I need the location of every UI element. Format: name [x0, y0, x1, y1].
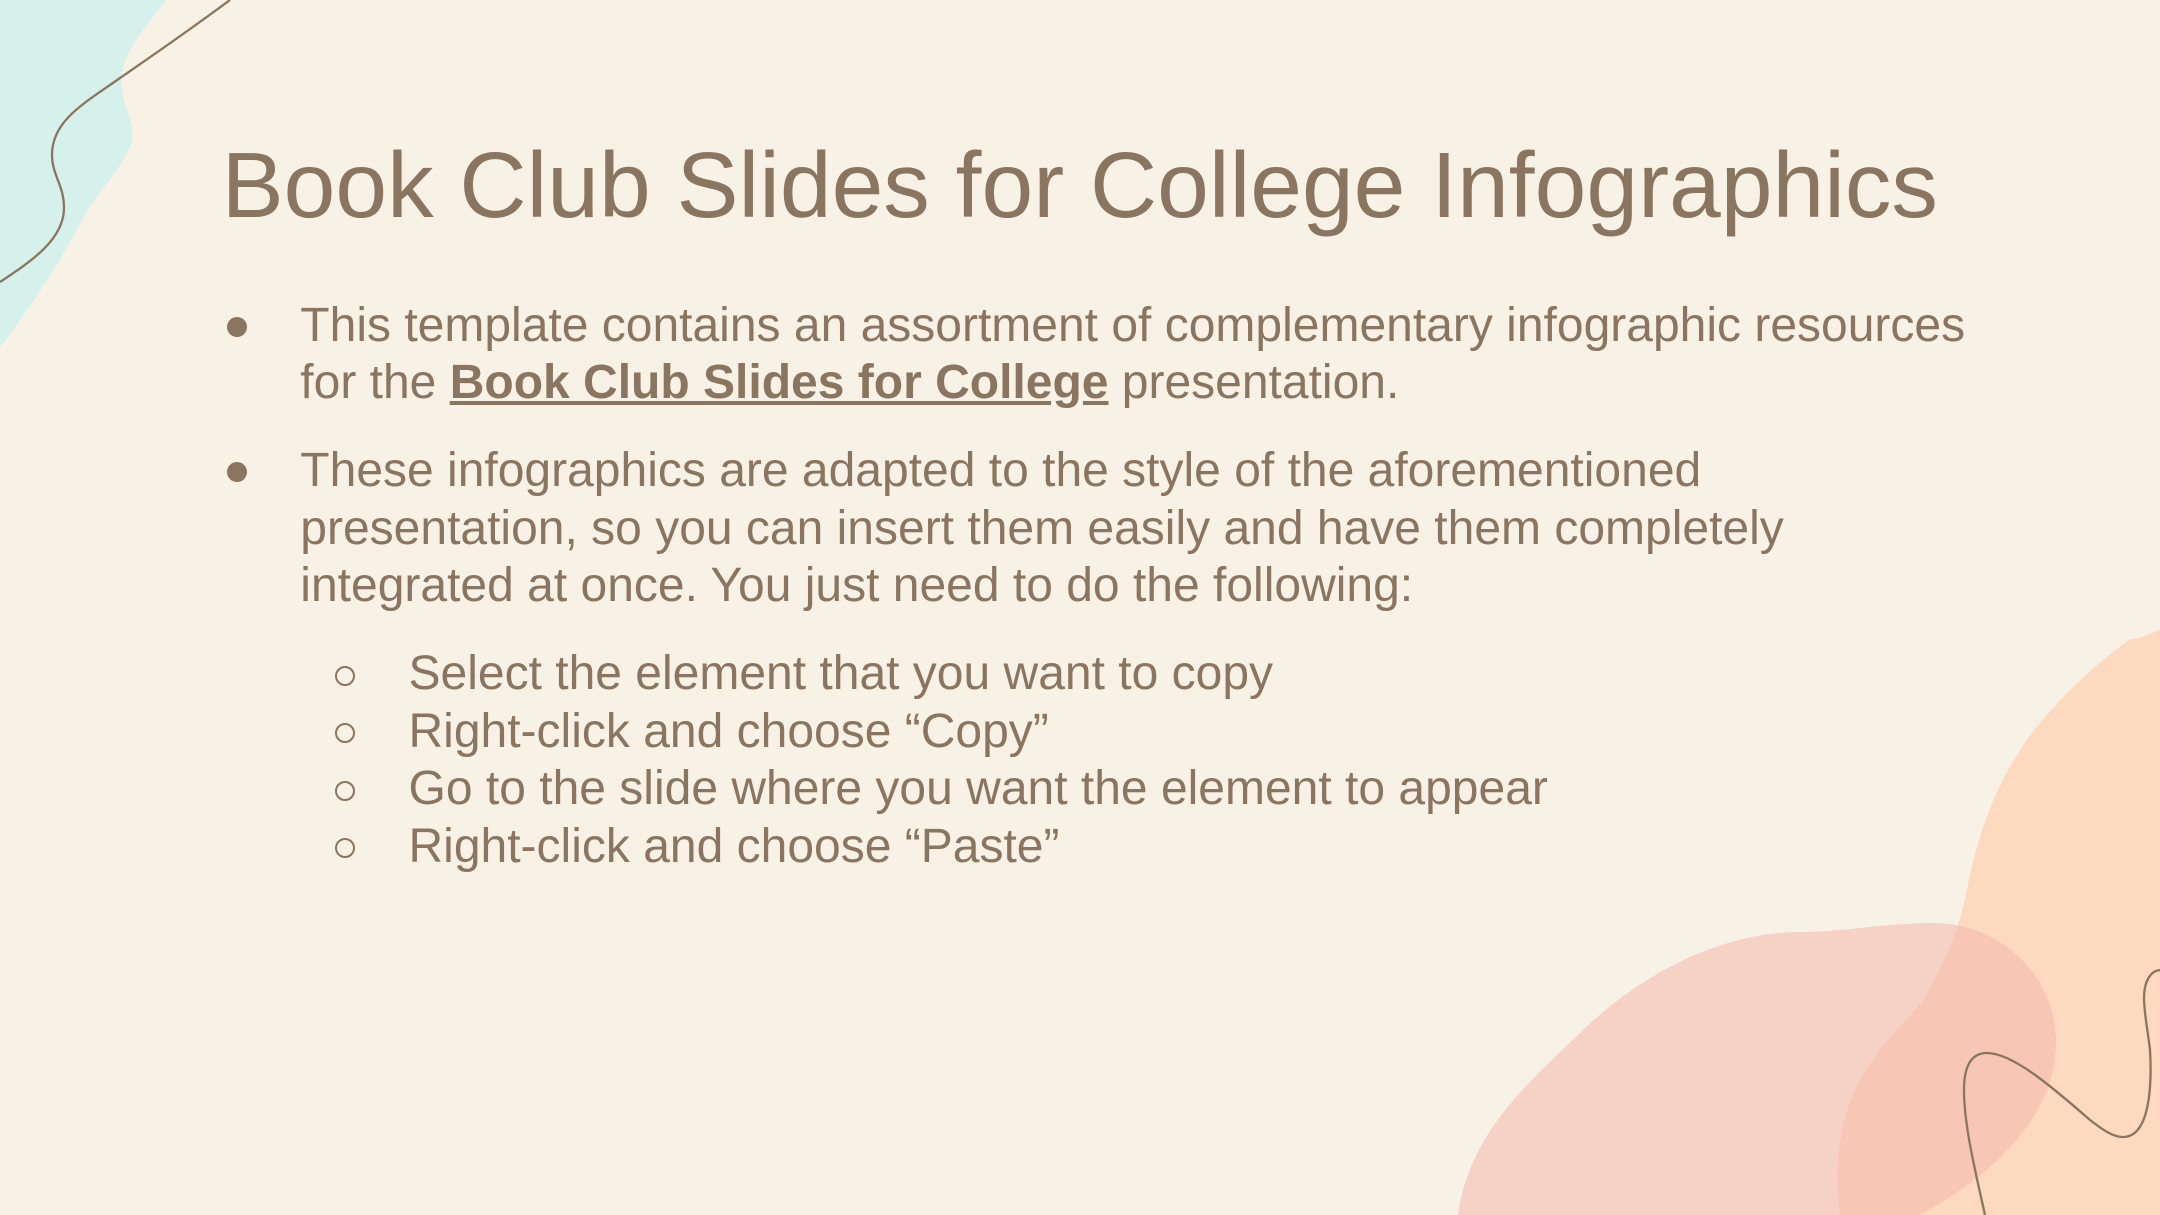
hollow bullet icon: step 2 — [335, 723, 355, 743]
blob: peach bottom right — [1838, 630, 2160, 1215]
curve: top left line — [0, 0, 230, 282]
text block: second paragraph: These infographics are adapted to the style of the aforementioned — [300, 444, 1701, 497]
title: Book Club Slides for College Infographics — [222, 133, 1938, 237]
step 4 text: Right-click and choose “Paste” — [408, 820, 1059, 873]
hollow bullet icon: step 4 — [335, 838, 355, 858]
text block: second paragraph — [300, 444, 1784, 612]
bullet icon: second paragraph — [227, 462, 247, 482]
blob: pink bottom right — [1458, 923, 2056, 1215]
step 3 text: Go to the slide where you want the element to appear — [408, 762, 1548, 815]
text block: first paragraph — [300, 299, 1965, 409]
bullet icon: first paragraph — [227, 317, 247, 337]
hollow bullet icon: step 1 — [335, 666, 355, 686]
text block: second paragraph: integrated at once. You just need to do the following: — [300, 559, 1413, 612]
step 1 text: Select the element that you want to copy — [408, 647, 1273, 700]
text block: first paragraph: for the Book Club Slides for College presentation. — [300, 356, 1399, 409]
blob: teal top left — [0, 0, 166, 347]
step 2 text: Right-click and choose “Copy” — [408, 705, 1049, 758]
hollow bullet icon: step 3 — [335, 780, 355, 800]
text block: second paragraph: presentation, so you can insert them easily and have them completely — [300, 502, 1784, 555]
curve: bottom right line — [1964, 970, 2160, 1215]
text block: first paragraph: This template contains an assortment of complementary infographic resources — [300, 299, 1965, 352]
